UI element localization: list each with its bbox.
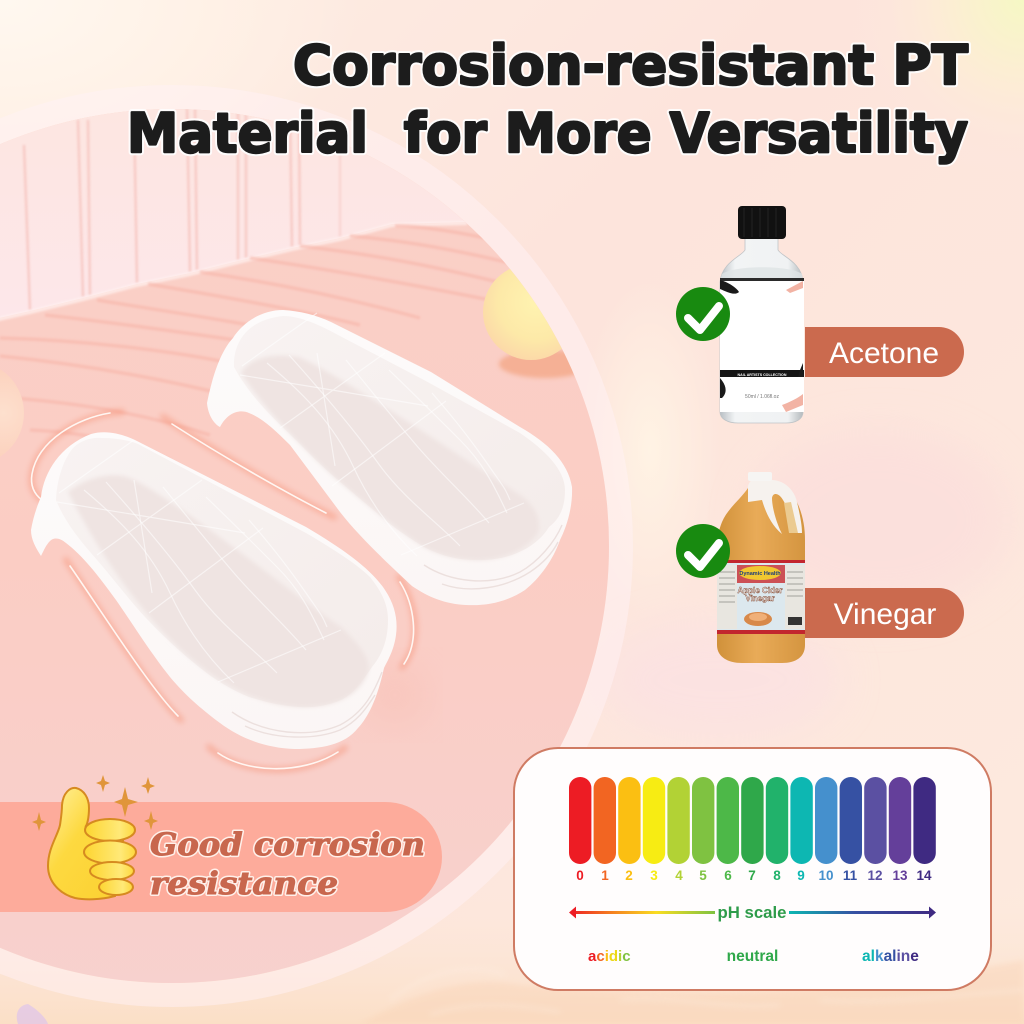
banner text: Good corrosion: [150, 827, 425, 863]
pH arrow: [569, 904, 936, 922]
pH numbers: 13: [892, 868, 908, 883]
pH numbers: 3: [650, 868, 658, 883]
insole: left: [31, 432, 397, 749]
insole: right: [207, 310, 572, 605]
bottle: acetone: 50ml / 1.06fl.oz: [745, 394, 779, 400]
label: neutral: neutral: [727, 948, 778, 965]
pH numbers: 10: [818, 868, 834, 883]
pH numbers: 12: [867, 868, 883, 883]
pH numbers: 7: [748, 868, 756, 883]
pH numbers: 8: [773, 868, 781, 883]
icon: pink pearl: [0, 384, 24, 444]
pH numbers: 6: [724, 868, 732, 883]
title: Corrosion-resistant PT: [293, 34, 968, 97]
banner: good corrosion resistance: [0, 775, 442, 912]
label: acetone: Acetone: [829, 337, 939, 370]
label: vinegar: [805, 588, 964, 638]
pH numbers: 9: [797, 868, 805, 883]
title: Material for More Versatility: [127, 102, 968, 165]
banner text: resistance: [150, 866, 338, 902]
jug: vinegar: [717, 472, 805, 663]
check mark: vinegar: [676, 524, 730, 578]
label: vinegar: Vinegar: [834, 598, 936, 631]
check mark: acetone: [676, 287, 730, 341]
title: Corrosion-resistant PT: [293, 34, 968, 97]
icon: yellow pearl: [483, 269, 562, 360]
bottle: acetone: [720, 206, 804, 423]
label: alkaline: alkaline: [862, 948, 919, 965]
panel: pH scale: [514, 748, 991, 990]
banner text: resistance: [150, 866, 338, 902]
pH numbers: 4: [675, 868, 683, 883]
pH colour bars: [569, 777, 936, 864]
pH numbers: [576, 868, 932, 883]
icon: sparkles: [32, 775, 158, 831]
jug: vinegar: Apple Cider: [738, 586, 782, 595]
pH numbers: 11: [843, 868, 858, 883]
banner text: Good corrosion: [150, 827, 425, 863]
title: Material for More Versatility: [127, 102, 968, 165]
motion arcs around insoles: [31, 412, 415, 770]
jug: vinegar: Dynamic Health: [739, 571, 781, 577]
pH arrow: pH scale: [718, 904, 786, 922]
pH numbers: 0: [576, 868, 584, 883]
pH numbers: 14: [916, 868, 932, 883]
pH numbers: 1: [601, 868, 609, 883]
title: [127, 34, 968, 165]
label: acidic: acidic: [588, 948, 631, 965]
panel: pink circular scene: [0, 90, 621, 1000]
pH numbers: 2: [625, 868, 633, 883]
icon: thumbs up: [48, 788, 136, 899]
pH numbers: 5: [699, 868, 707, 883]
banner text: [150, 827, 425, 902]
label: acetone: [805, 327, 964, 377]
bottle: acetone: NAIL ARTISTS COLLECTION: [738, 373, 787, 377]
jug: vinegar: Vinegar: [745, 594, 775, 603]
